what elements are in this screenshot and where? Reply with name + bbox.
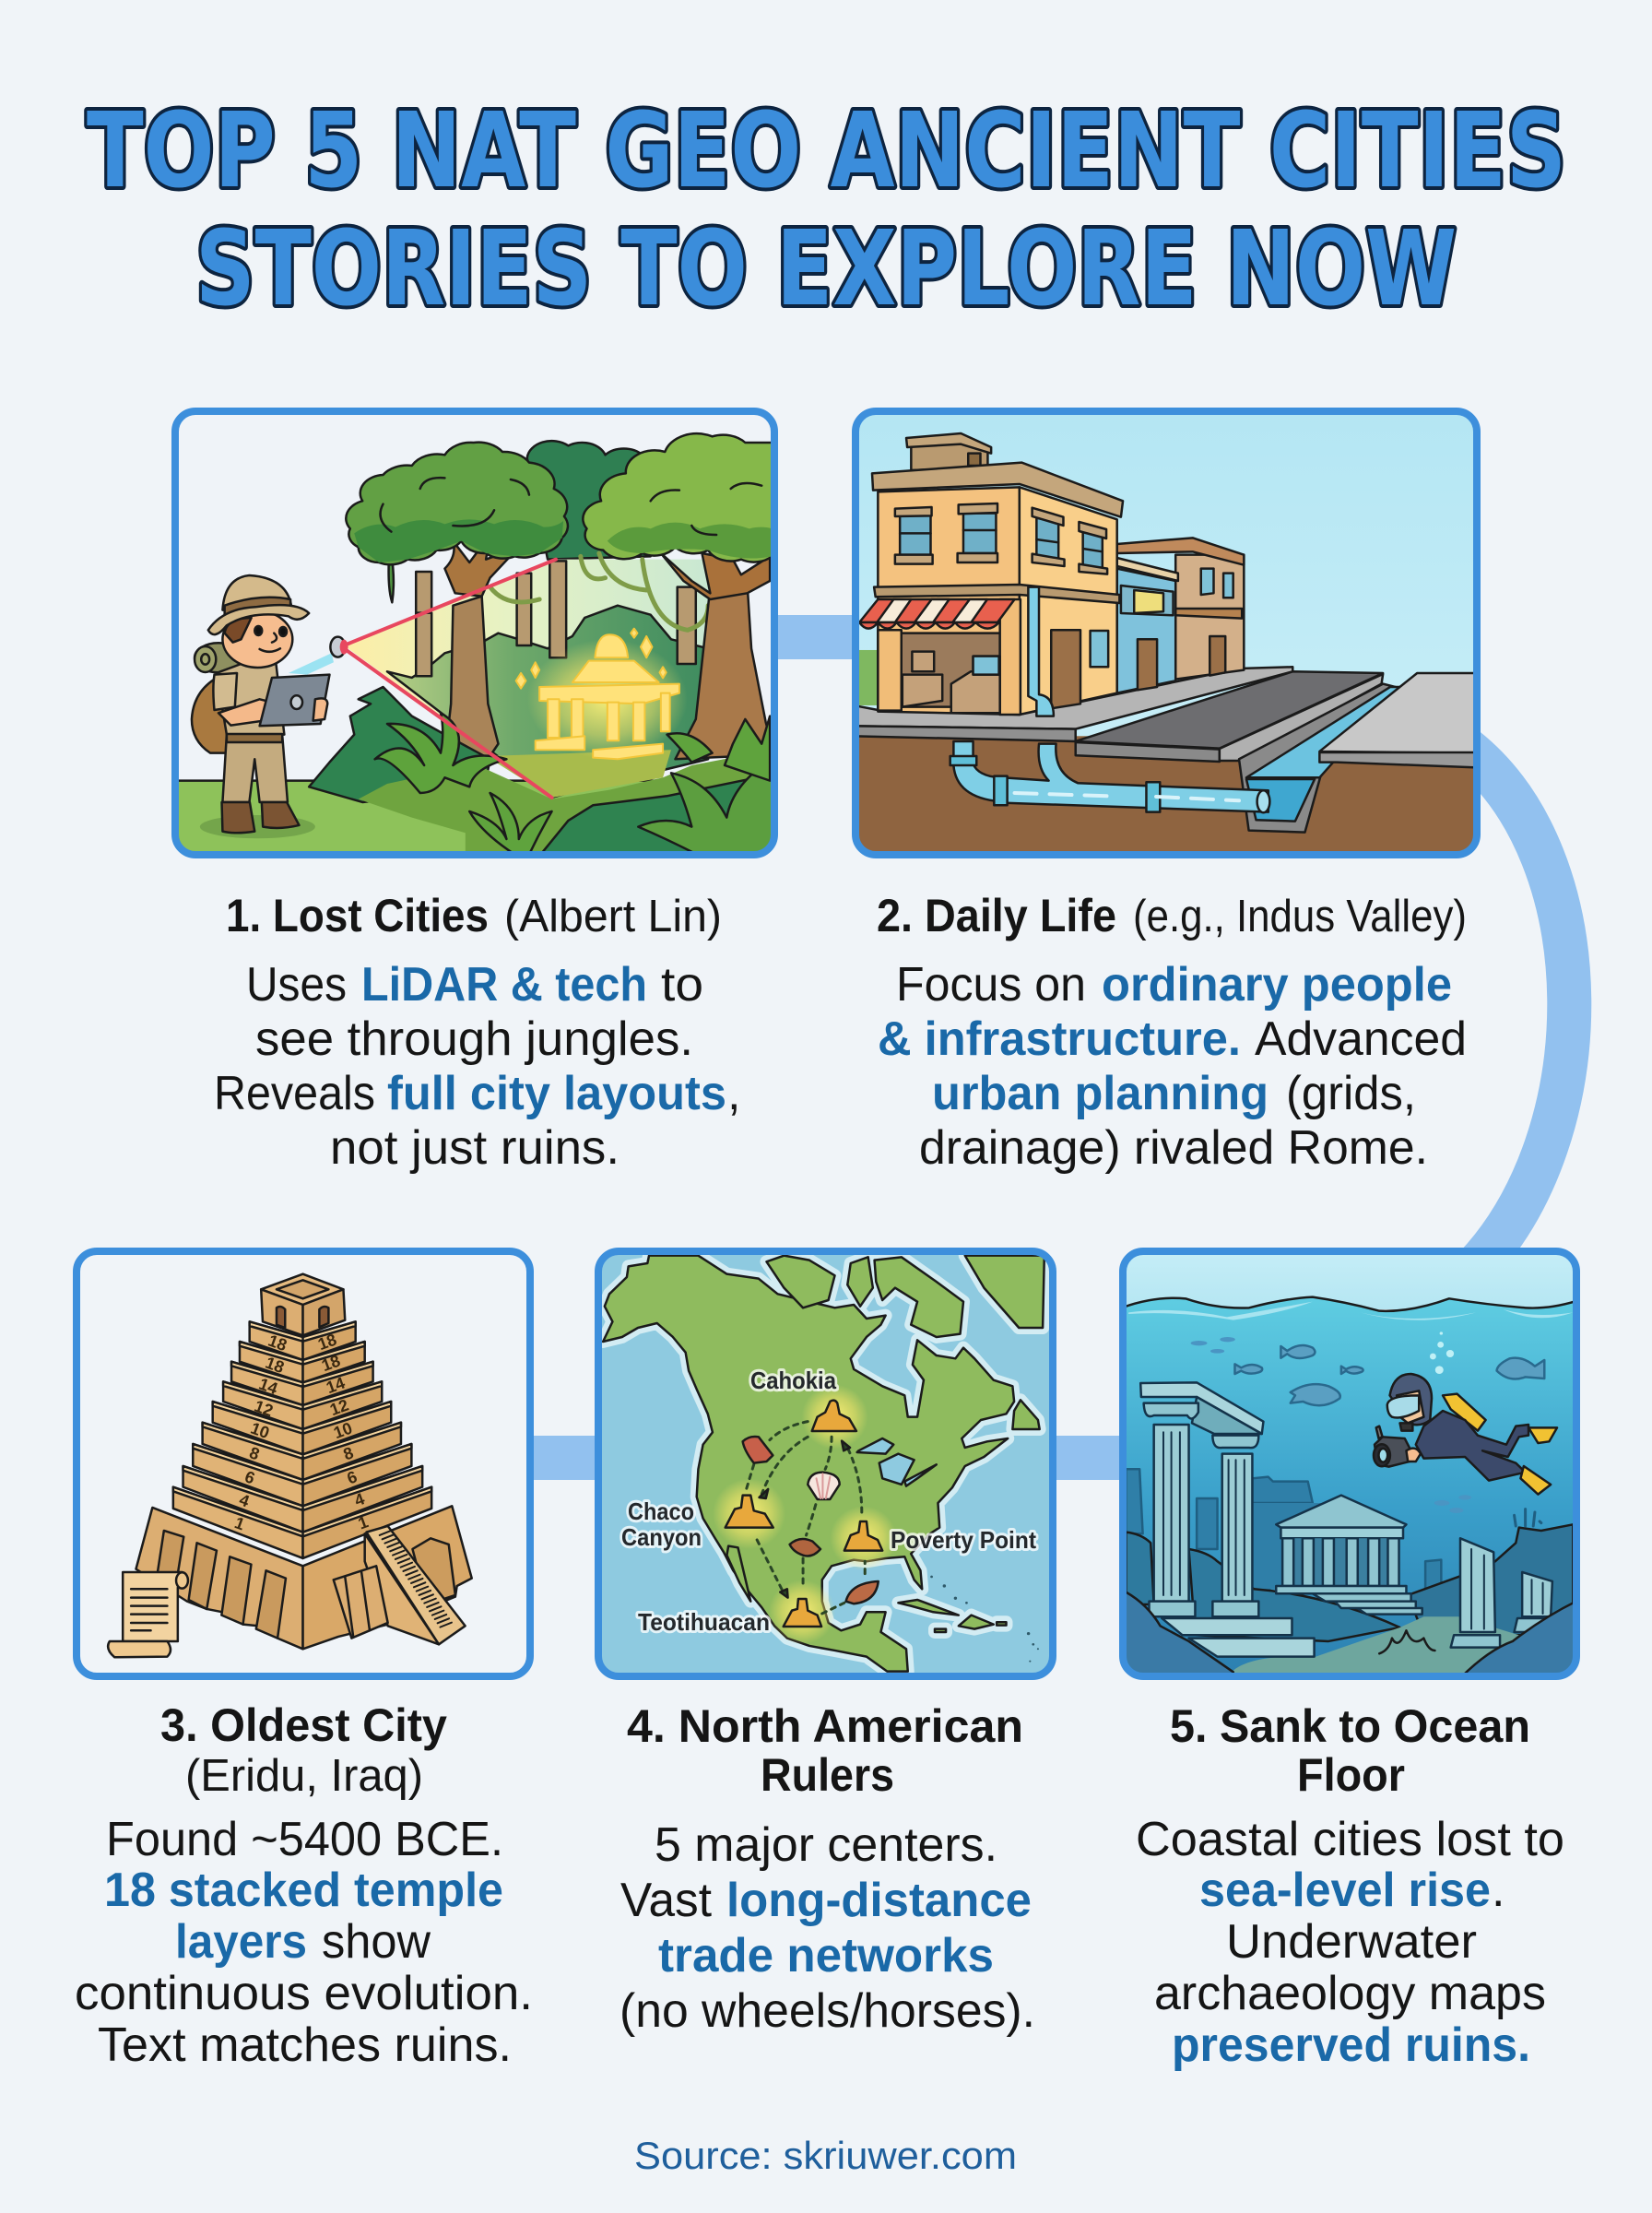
tier numbers: 18 [266,1331,289,1355]
panel 3: ziggurat illustration [75,1251,533,1681]
text block 4: north american rulers: Vast [620,1874,713,1927]
tier numbers: 4 [352,1489,367,1509]
tier numbers: 10 [248,1419,272,1442]
tier numbers [232,1331,371,1533]
text block 5: sank to ocean floor: Underwater [1226,1915,1477,1969]
text block 4: north american rulers: 4. North American [627,1700,1023,1752]
text block 1: lost cities: see through jungles. [255,1012,693,1066]
map labels: Cahokia [750,1367,836,1394]
text block 1: lost cities: LiDAR & tech [361,958,647,1012]
title [87,91,1566,329]
tier numbers: 12 [252,1397,276,1420]
panel 3 frame [77,1251,530,1676]
text block 1: lost cities [214,890,740,1175]
map labels: Teotihuacan [638,1608,770,1636]
text block 2: daily life: Advanced [1255,1012,1467,1066]
text block 1: lost cities: Uses [246,958,347,1012]
text block 2: daily life [877,890,1467,1175]
tier numbers: 10 [331,1419,355,1442]
text block 2: daily life: 2. Daily Life [877,890,1116,941]
text block 5: sank to ocean floor [1136,1700,1564,2072]
text block 4: north american rulers: trade networks [658,1929,994,1982]
tier numbers: 6 [345,1467,360,1487]
text block 5: sank to ocean floor: sea-level rise [1199,1864,1491,1917]
tier numbers: 18 [319,1352,343,1375]
panel 4: trade map [594,1248,1060,1678]
text block 5: sank to ocean floor: 5. Sank to Ocean [1170,1700,1530,1752]
text block 2: daily life: & infrastructure. [878,1012,1241,1066]
panel 5: underwater ruins illustration [1119,1248,1579,1680]
tier numbers: 12 [327,1396,351,1419]
text block 4: north american rulers: Rulers [761,1749,894,1801]
text block 3: oldest city: (Eridu, Iraq) [185,1751,423,1801]
panel 1 frame [175,411,774,855]
tier numbers: 8 [247,1443,262,1463]
tier numbers: 18 [315,1331,339,1354]
text block 2: daily life: urban planning [932,1067,1268,1120]
tier numbers: 18 [263,1354,287,1377]
tier numbers: 1 [232,1513,247,1533]
text block 5: sank to ocean floor: Floor [1297,1749,1405,1801]
text block 3: oldest city: continuous evolution. [75,1967,533,2020]
panel 2: daily life illustration [854,408,1483,858]
text block 2: daily life: (e.g., Indus Valley) [1133,892,1467,941]
text block 2: daily life: ordinary people [1102,958,1452,1012]
panel 4 frame [598,1251,1053,1676]
text block 1: lost cities: , [727,1067,740,1120]
text block 5: sank to ocean floor: Coastal cities lost to [1136,1813,1564,1866]
connector path between panels [525,637,1569,1458]
tier numbers: 6 [242,1467,257,1487]
text block 2: daily life: (grids, [1286,1067,1416,1120]
text block 5: sank to ocean floor: . [1492,1864,1504,1917]
text block 4: north american rulers: 5 major centers. [655,1818,997,1872]
tier numbers: 1 [356,1512,371,1533]
text block 1: lost cities: full city layouts [387,1067,726,1120]
map labels [621,1367,1036,1636]
text block 4: north american rulers [620,1700,1035,2038]
text block 3: oldest city: show [322,1915,431,1969]
text block 2: daily life: Focus on [896,958,1086,1012]
map labels: Chaco [628,1497,694,1525]
map labels: Poverty Point [891,1526,1036,1554]
map labels: Canyon [621,1523,702,1551]
text block 1: lost cities: to [661,958,703,1012]
panel 5 frame [1123,1251,1576,1676]
text block 3: oldest city: 18 stacked temple [104,1864,503,1917]
text block 5: sank to ocean floor: archaeology maps [1154,1967,1546,2020]
text block 1: lost cities: (Albert Lin) [504,892,722,941]
panel 2 frame [856,411,1477,855]
text block 3: oldest city: Text matches ruins. [98,2018,512,2072]
tier numbers: 14 [256,1375,280,1398]
text block 3: oldest city [75,1699,533,2072]
tier numbers: 8 [341,1443,356,1463]
tier numbers: 14 [324,1374,348,1397]
text block 3: oldest city: layers [175,1915,307,1969]
tier numbers: 4 [237,1490,252,1510]
text block 3: oldest city: Found ~5400 BCE. [106,1813,503,1866]
text block 3: oldest city: 3. Oldest City [160,1699,447,1751]
panel 1: lost cities illustration [169,408,778,858]
text block 4: north american rulers: (no wheels/horses). [620,1984,1035,2038]
text block 4: north american rulers: long-distance [726,1874,1032,1927]
text block 5: sank to ocean floor: preserved ruins. [1172,2018,1530,2072]
source line: Source: skriuwer.com [634,2134,1017,2177]
text block 1: lost cities: 1. Lost Cities [226,890,489,941]
text block 2: daily life: drainage) rivaled Rome. [919,1121,1428,1175]
text block 1: lost cities: Reveals [214,1067,375,1120]
text block 1: lost cities: not just ruins. [330,1121,620,1175]
